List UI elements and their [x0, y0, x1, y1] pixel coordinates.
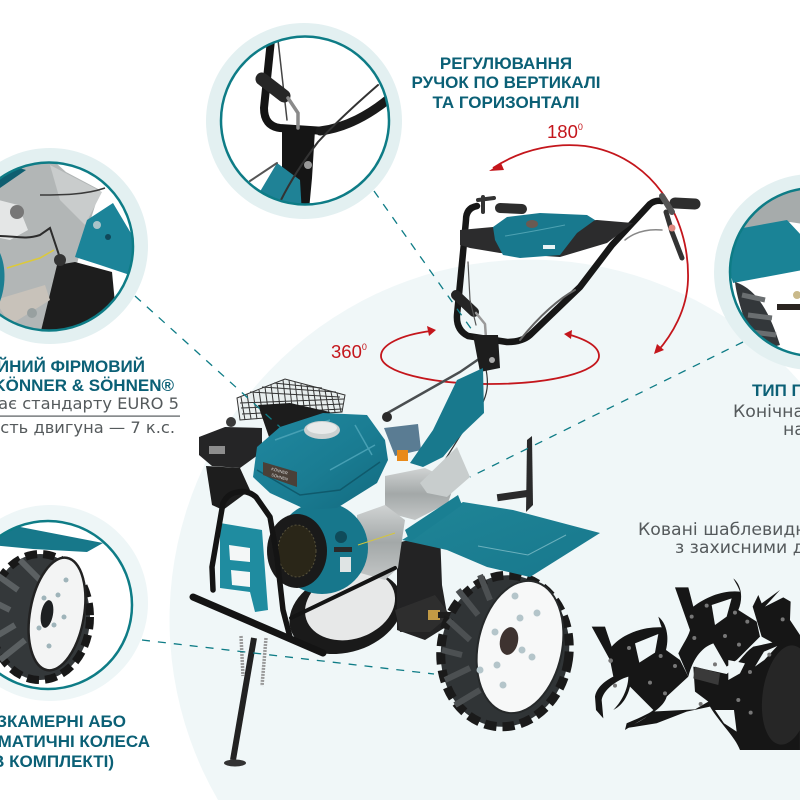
fuel tank — [253, 413, 388, 510]
dashed leader: engine — [135, 296, 280, 427]
heading: wheels — [0, 712, 150, 771]
tank label: KÖNNER — [271, 466, 289, 476]
tank label — [263, 462, 297, 487]
text block: engine — [0, 357, 180, 437]
fuel filter tank — [199, 417, 262, 510]
fender — [402, 495, 600, 577]
teal column — [410, 368, 484, 467]
handle control panel — [460, 220, 633, 257]
callout: wheel detail — [0, 505, 148, 701]
tank label: SÖHNEN — [271, 472, 289, 482]
yellow wire — [358, 533, 395, 545]
heading: handle adjustment: РЕГУЛЮВАННЯ — [440, 54, 572, 73]
heading: handle adjustment — [412, 54, 600, 112]
callout: engine detail — [0, 148, 148, 344]
teal front guard — [220, 523, 268, 612]
frame tubes — [193, 492, 395, 653]
label 180 degrees: 0 — [578, 122, 583, 132]
callout: transmission detail — [714, 174, 800, 370]
handle teal dash — [493, 213, 595, 258]
engine black top — [258, 403, 330, 440]
air filter cage — [237, 379, 345, 420]
heading: handle adjustment: РУЧОК ПО ВЕРТИКАЛІ — [412, 73, 600, 92]
label 180 degrees: 180 — [547, 121, 578, 142]
rotation arrow 360 degrees — [381, 326, 599, 384]
text block: transmission — [733, 381, 800, 440]
column bracket — [473, 335, 500, 372]
stand — [224, 636, 266, 766]
label 360 degrees: 0 — [362, 342, 367, 352]
orange cap — [397, 450, 408, 461]
illustration: tiller blades — [592, 578, 800, 750]
rotation arrow 180 degrees — [489, 145, 688, 354]
silver horizontal housing — [385, 468, 455, 520]
lever rod and cables — [384, 350, 492, 415]
rear wheel — [278, 556, 414, 668]
dashed leader: handle adjustment — [374, 191, 472, 330]
transmission housing — [395, 532, 458, 640]
callout: handle adjustment — [206, 23, 402, 219]
background pale circle — [170, 260, 800, 800]
rear hitch — [497, 436, 533, 512]
dashed leader: transmission — [470, 342, 743, 477]
dashed leader: wheel — [142, 640, 434, 674]
front wheel — [431, 567, 579, 735]
illustration: walk-behind tiller — [193, 196, 695, 766]
label 360 degrees: 360 — [331, 341, 362, 362]
silver bracket — [420, 447, 470, 497]
gearbox — [357, 505, 405, 580]
heading: handle adjustment: ТА ГОРИЗОНТАЛІ — [433, 93, 579, 112]
blue rear part — [384, 424, 421, 456]
engine cylinder housing and starter — [267, 502, 368, 594]
text block: tillers — [638, 520, 800, 558]
handlebar — [456, 196, 695, 342]
